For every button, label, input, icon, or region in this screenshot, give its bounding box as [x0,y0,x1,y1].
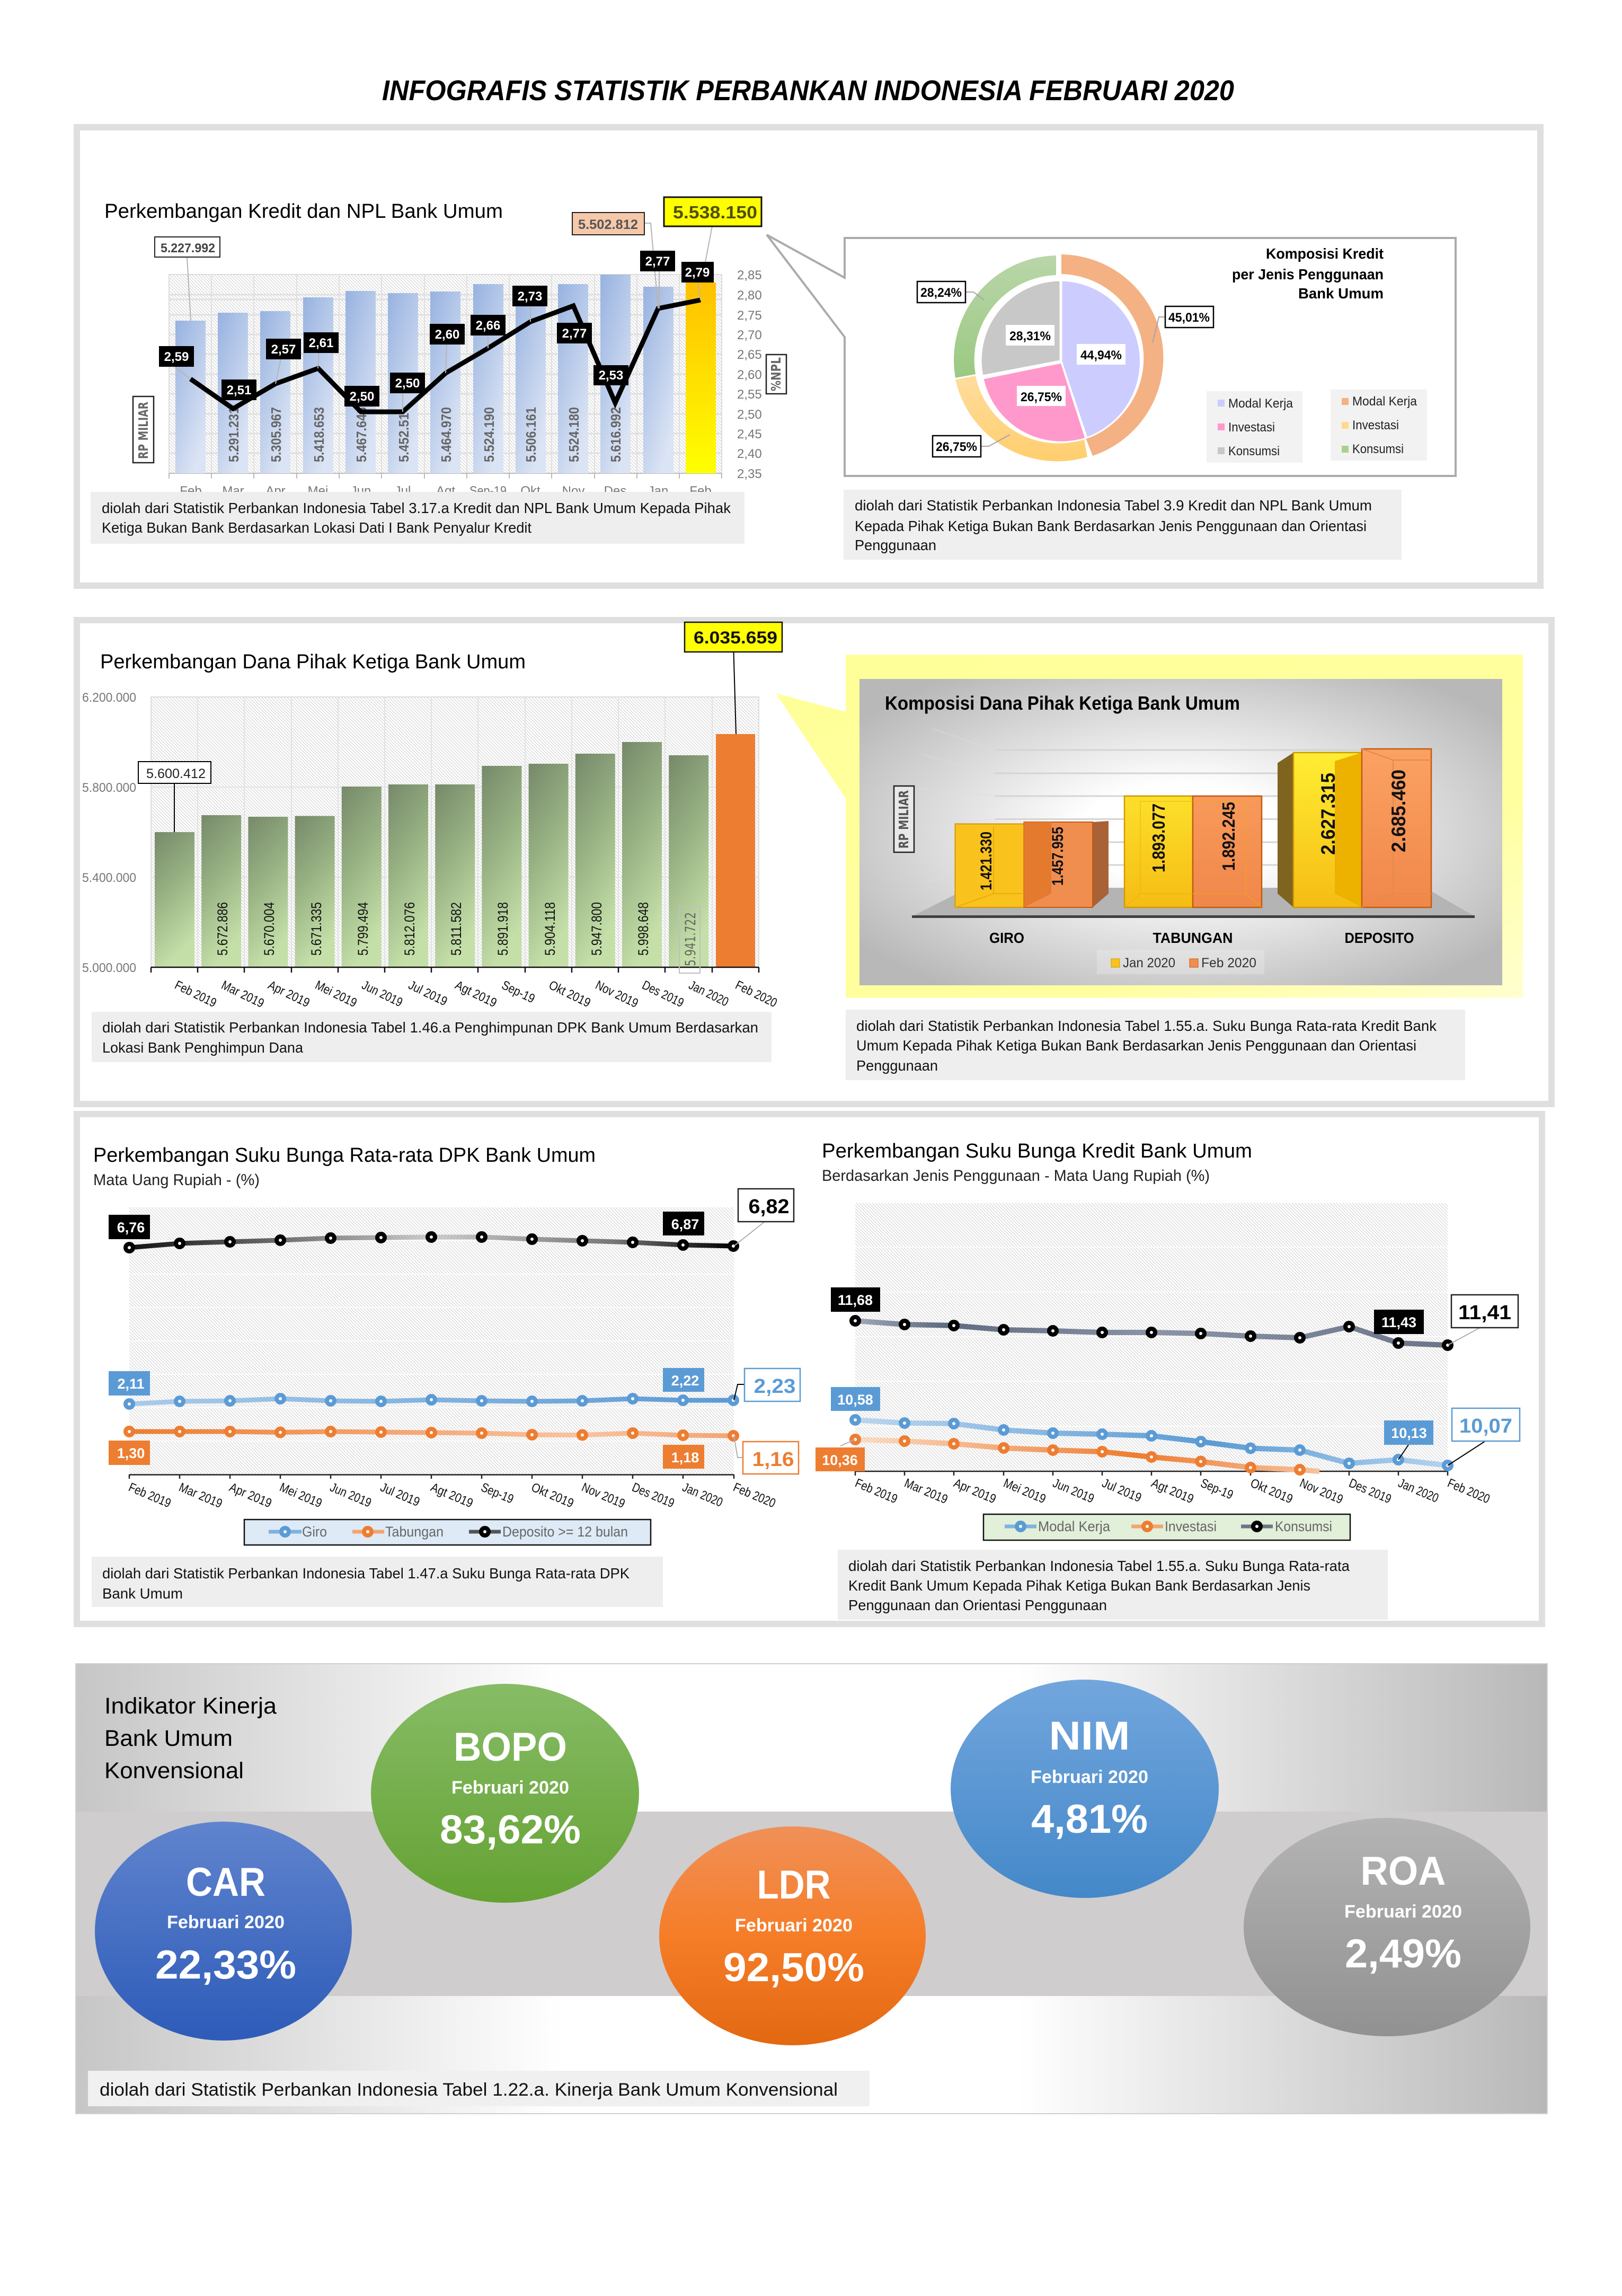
KPI: ROA: 2,49% [1345,1931,1461,1976]
KPI: ROA: Februari 2020 [1344,1902,1462,1922]
bar value labels: 5.672.886 [215,902,231,956]
source note: kinerja: diolah dari Statistik Perbankan Indonesia Tabel 1.22.a. Kinerja Bank Umum Konvensional [100,2080,838,2100]
NPL line [191,300,701,412]
month labels: Sep-19 [469,484,507,498]
legend: suku bunga kredit [983,1514,1350,1540]
data labels: konsumsi: 11,68 [838,1292,873,1308]
bar value labels: 5.467.646 [353,407,369,462]
bar value labels: 5.891.918 [495,902,511,956]
callout panel: komposisi kredit [767,235,1456,476]
data labels: tabungan [109,1441,799,1474]
heading: indikator kinerja: Indikator Kinerja [104,1693,277,1719]
floor [912,888,1475,916]
panel: indikator kinerja [76,1664,1547,2114]
month labels: Feb [689,484,712,498]
month labels: Mei 2019 [1001,1476,1048,1506]
month labels: Jul 2019 [378,1480,422,1509]
data labels: giro: 2,23 [754,1375,796,1398]
KPI: LDR [659,1826,926,2045]
month labels: Feb 2019 [853,1476,900,1506]
month labels: Jun 2019 [328,1480,374,1511]
month labels: Jul 2019 [1100,1476,1144,1505]
KPI: LDR: Februari 2020 [735,1915,853,1936]
series: modal kerja [852,1416,1451,1469]
month labels: Mar 2019 [902,1476,950,1507]
right axis labels: 2,75 [737,308,762,323]
bar value labels: 5.799.494 [355,902,371,956]
bar value labels: 5.671.335 [308,902,324,956]
month labels: Feb 2019 [127,1480,173,1511]
KPI: BOPO: BOPO [454,1725,567,1770]
series: giro [126,1395,737,1408]
month labels: Jul 2019 [406,978,449,1009]
pie data labels: 28,31% [1009,329,1051,343]
source note: komposisi DPK: diolah dari Statistik Perbankan Indonesia Tabel 1.55.a. Suku Bunga Rata-rata Kredit Bank [856,1018,1437,1034]
bar value labels: 5.670.004 [261,902,277,956]
legend: outer ring: Investasi [1352,418,1399,432]
data labels: giro [109,1368,800,1401]
source note: komposisi kredit: Penggunaan [855,537,936,553]
panel: dana pihak ketiga [77,620,1552,1104]
DEPOSITO bars [1278,749,1431,907]
month labels: Jun [351,484,371,498]
bar value labels [226,407,624,462]
panel: kredit dan NPL [77,127,1540,586]
axis title: NPL [766,355,786,394]
axis title: Rp miliar: RP MILIAR [896,790,911,849]
data label: investasi [816,1447,865,1471]
month labels: Feb 2019 [172,978,219,1010]
right axis labels: 2,45 [737,427,762,441]
month labels: Jun 2019 [359,978,405,1010]
month labels: Sep-19 [499,978,537,1006]
callout: Feb 2019: 5.227.992 [161,241,215,255]
bar value labels: 5.947.800 [589,902,605,956]
legend: suku bunga DPK: Giro [302,1524,327,1540]
month labels: Okt [520,484,540,498]
NPL labels: 2,73 [518,289,542,304]
month labels: Jan 2020 [1396,1476,1441,1506]
bar value labels: 1.457.955 [1049,827,1067,886]
month labels: Des [604,484,626,498]
KPI: ROA: ROA [1361,1849,1446,1894]
callout: Feb 2020 [685,622,782,734]
month labels: Mar [222,484,244,498]
data label: investasi: 10,36 [822,1452,858,1468]
NPL labels: 2,50 [350,390,374,404]
data labels: giro: 2,22 [671,1373,699,1389]
callout: Feb 2019 [155,237,220,257]
KPI: NIM: 4,81% [1031,1797,1148,1842]
month labels [172,978,779,1011]
KPI: NIM [951,1680,1219,1898]
source note: suku bunga kredit: Penggunaan dan Orientasi Penggunaan [848,1597,1107,1613]
legend: suku bunga DPK: Deposito >= 12 bulan [502,1524,628,1540]
right axis labels: 2,65 [737,348,762,362]
pie data labels: 45,01% [1168,311,1210,325]
heading: perkembangan DPK: Perkembangan Dana Pihak Ketiga Bank Umum [100,651,526,673]
KPI: BOPO: 83,62% [440,1807,581,1852]
right axis labels: 2,50 [737,408,762,422]
legend: Feb 2020 [1201,956,1256,970]
y axis labels [82,691,136,975]
data labels: tabungan: 1,16 [752,1449,794,1471]
source note: kredit: Ketiga Bukan Bank Berdasarkan Lokasi Dati I Bank Penyalur Kredit [102,519,531,536]
data labels: konsumsi: 11,43 [1381,1314,1416,1330]
month labels: Sep-19 [1199,1476,1235,1503]
NPL labels: 2,51 [227,383,251,398]
legend: suku bunga kredit: Investasi [1165,1518,1217,1534]
month labels: Apr 2019 [227,1480,274,1511]
bar value labels: 5.616.992 [608,407,624,462]
NPL labels: 2,59 [164,350,189,364]
month labels: Nov 2019 [1298,1476,1345,1507]
pie data labels: 28,24% [920,286,962,300]
KPI: LDR: LDR [757,1862,831,1908]
right axis labels: 2,40 [737,447,762,461]
chart: suku bunga kredit [816,1203,1520,1507]
right axis labels: 2,60 [737,368,762,382]
data labels: giro: 2,11 [117,1376,145,1392]
month labels: Des 2019 [1347,1476,1394,1506]
TABUNGAN bars [1124,796,1262,907]
heading: suku bunga kredit: Berdasarkan Jenis Penggunaan - Mata Uang Rupiah (%) [822,1167,1210,1185]
heading: komposisi kredit: Bank Umum [1298,285,1384,302]
source note: suku bunga DPK: Bank Umum [102,1585,183,1602]
legend: outer ring: Konsumsi [1352,442,1404,456]
right axis labels: 2,80 [737,288,762,303]
axis title: Rp miliar [133,396,154,463]
KPI: CAR: 22,33% [155,1942,296,1988]
month labels: Agt 2019 [429,1480,475,1511]
axis title: Rp miliar: RP MILIAR [136,402,151,459]
source note: DPK: diolah dari Statistik Perbankan Indonesia Tabel 1.46.a Penghimpunan DPK Bank Umum Berdasarkan [102,1019,758,1036]
callout: Feb 2019: 5.600.412 [146,766,206,781]
month labels: Feb 2020 [1446,1476,1492,1506]
chart: suku bunga DPK [109,1189,800,1511]
bar value labels: 5.998.648 [635,902,651,956]
bar value labels: 5.305.967 [268,407,284,462]
KPI: CAR: Februari 2020 [167,1912,285,1932]
month labels: Sep-19 [479,1480,516,1507]
month labels: Jan 2020 [686,978,731,1009]
series: tabungan [126,1428,737,1440]
title: INFOGRAFIS STATISTIK PERBANKAN INDONESIA FEBRUARI 2020 [382,75,1234,107]
source note: suku bunga kredit: diolah dari Statistik Perbankan Indonesia Tabel 1.55.a. Suku Bunga Rata-rata [848,1558,1350,1574]
legend: inner pie: Konsumsi [1228,444,1280,458]
category labels: TABUNGAN [1153,930,1233,946]
source note: suku bunga DPK [92,1557,663,1607]
right axis labels: 2,55 [737,387,762,402]
source note: komposisi DPK: Penggunaan [856,1057,938,1074]
heading: perkembangan kredit: Perkembangan Kredit dan NPL Bank Umum [104,200,503,223]
bar value labels: 5.506.161 [523,407,539,462]
callout: Jan 2020 [572,213,644,235]
month labels [853,1476,1492,1507]
legend: suku bunga DPK [244,1520,651,1545]
month labels: Des 2019 [640,978,686,1010]
bar value labels: 1.421.330 [978,832,995,890]
NPL labels: 2,79 [685,266,710,280]
KPI: NIM: NIM [1049,1714,1130,1759]
month labels: Feb 2020 [731,1480,778,1511]
source note: DPK [92,1012,772,1062]
chart background [859,679,1502,985]
month labels: Okt 2019 [529,1480,576,1511]
KPI: CAR: CAR [186,1860,265,1905]
donut: outer ring [954,254,1163,461]
y axis labels: 5.400.000 [82,871,136,885]
source note: komposisi kredit: Kepada Pihak Ketiga Bukan Bank Berdasarkan Jenis Penggunaan dan Orientasi [855,518,1367,534]
callout: Jan 2020: 5.502.812 [578,217,638,232]
data labels: deposito: 6,82 [748,1196,790,1218]
right axis labels: 2,35 [737,467,762,481]
source note: kredit: diolah dari Statistik Perbankan Indonesia Tabel 3.17.a Kredit dan NPL Bank Umum Kepada Pihak [102,500,731,516]
bars [175,275,716,473]
month labels: Jun 2019 [1051,1476,1096,1506]
data labels: modal kerja: 10,58 [837,1392,873,1408]
callout: Feb 2020 [664,197,761,226]
connector lines [175,223,712,412]
connector lines: blue labels [1398,1441,1485,1465]
connector line: giro [734,1384,744,1400]
bars [155,742,708,967]
heading: indikator kinerja: Konvensional [104,1758,244,1783]
month labels: Okt 2019 [546,978,593,1010]
pie data labels: 26,75% [1021,390,1062,404]
KPI: BOPO: Februari 2020 [451,1778,569,1798]
source note: kinerja [88,2071,870,2106]
panel: suku bunga [77,1114,1542,1624]
NPL labels: 2,77 [645,254,670,269]
series: deposito [126,1233,737,1251]
legend: inner pie [1207,391,1302,463]
month labels: Mar 2019 [219,978,267,1011]
series: investasi [852,1436,1319,1473]
legend: outer ring: Modal Kerja [1352,394,1417,409]
legend: inner pie: Investasi [1228,420,1275,435]
month labels: Mar 2019 [177,1480,224,1511]
KPI: BOPO [371,1684,639,1903]
background band [76,1812,1547,1996]
month labels: Feb [180,484,202,498]
source note: suku bunga kredit [838,1550,1388,1620]
month labels: Mei 2019 [313,978,359,1010]
series: konsumsi [852,1317,1451,1349]
month labels: Agt [436,484,455,498]
callout panel: komposisi DPK [776,655,1523,997]
source note: suku bunga kredit: Kredit Bank Umum Kepada Pihak Ketiga Bukan Bank Berdasarkan Jenis [848,1577,1310,1594]
heading: komposisi DPK: Komposisi Dana Pihak Ketiga Bank Umum [885,692,1240,714]
legend: outer ring [1331,390,1427,461]
bar value labels: 5.811.582 [448,902,464,956]
heading: komposisi kredit: per Jenis Penggunaan [1232,266,1384,282]
legend: suku bunga kredit: Konsumsi [1275,1518,1332,1534]
month labels: Nov [562,484,584,498]
axis title: Rp miliar [894,786,914,852]
legend: inner pie: Modal Kerja [1228,396,1293,411]
month labels: Apr 2019 [952,1476,998,1506]
right axis labels: 2,85 [737,268,762,282]
NPL labels [159,251,714,407]
GIRO bars [955,821,1109,907]
axis title: NPL: %NPL [768,357,784,391]
month labels: Feb 2020 [733,978,779,1010]
bar value labels [978,770,1410,890]
month labels: Nov 2019 [580,1480,627,1511]
NPL labels: 2,50 [395,376,420,391]
right axis labels [737,268,762,481]
heading: suku bunga DPK [93,1144,596,1189]
bar value labels: 5.464.970 [438,407,454,462]
NPL labels: 2,77 [562,326,587,341]
pie data labels: 44,94% [1080,348,1122,363]
heading: komposisi kredit [1232,245,1384,302]
month labels [180,484,712,498]
connector lines [840,1328,1480,1446]
heading: komposisi kredit: Komposisi Kredit [1266,245,1384,262]
data labels: deposito [109,1189,794,1239]
boxed value label: Jan 2020: 5.941.722 [683,912,699,966]
source note: DPK: Lokasi Bank Penghimpun Dana [102,1039,303,1056]
heading: suku bunga DPK: Perkembangan Suku Bunga Rata-rata DPK Bank Umum [93,1144,596,1167]
month labels: Jan 2020 [680,1480,725,1510]
month labels: Apr 2019 [265,978,312,1010]
data labels: modal kerja: 10,07 [1459,1415,1512,1437]
y axis labels: 5.000.000 [82,961,136,975]
KPI: LDR: 92,50% [723,1945,864,1990]
3D bar chart [912,729,1475,946]
connector lines [734,1222,765,1458]
bar value labels: 5.524.190 [481,407,497,462]
legend [1097,950,1264,974]
month labels: Agt 2019 [1149,1476,1196,1506]
bar value labels: 2.685.460 [1388,770,1410,852]
legend: Jan 2020 [1123,956,1175,970]
heading: suku bunga kredit [822,1140,1252,1185]
NPL labels: 2,57 [271,342,296,357]
source note: kredit [91,492,744,544]
NPL labels: 2,66 [476,319,500,333]
y axis labels: 6.200.000 [82,691,136,705]
data labels: tabungan: 1,18 [671,1450,699,1465]
legend: suku bunga kredit: Modal Kerja [1038,1518,1111,1534]
NPL labels: 2,53 [599,368,623,383]
bar value labels: 2.627.315 [1317,773,1339,855]
month labels: Des 2019 [630,1480,677,1511]
callout: Feb 2020: 5.538.150 [673,202,757,222]
source note: komposisi kredit [844,490,1402,560]
data labels: konsumsi [831,1287,1518,1334]
month labels: Agt 2019 [453,978,499,1010]
bar value labels: 5.452.51 [396,413,412,462]
data labels: deposito: 6,87 [671,1216,699,1232]
bar value labels: 1.892.245 [1219,802,1238,871]
month labels: Mei 2019 [278,1480,324,1511]
data labels: konsumsi: 11,41 [1458,1302,1511,1324]
data labels: modal kerja: 10,13 [1391,1425,1427,1441]
data labels: modal kerja [831,1387,1520,1445]
bar value labels: 5.524.180 [566,407,582,462]
source note: suku bunga DPK: diolah dari Statistik Perbankan Indonesia Tabel 1.47.a Suku Bunga Rata-rata DPK [102,1565,630,1582]
month labels: Jul [395,484,411,498]
callout: Feb 2020: 6.035.659 [694,628,777,647]
boxed value label: Jan 2020 [679,906,700,973]
month labels: Okt 2019 [1248,1476,1295,1506]
source note: komposisi DPK: Umum Kepada Pihak Ketiga Bukan Bank Berdasarkan Jenis Penggunaan dan Orientasi [856,1037,1416,1054]
heading: suku bunga DPK: Mata Uang Rupiah - (%) [93,1171,260,1189]
month labels: Nov 2019 [593,978,641,1011]
data labels: tabungan: 1,30 [117,1445,145,1461]
data labels: deposito: 6,76 [117,1220,145,1235]
axis line and ticks [151,967,759,973]
KPI: NIM: Februari 2020 [1031,1767,1148,1787]
pie leader lines [965,292,1165,446]
highlighted bar: Feb 2020 [716,734,755,967]
heading: suku bunga kredit: Perkembangan Suku Bunga Kredit Bank Umum [822,1140,1252,1162]
right axis labels: 2,70 [737,328,762,342]
month labels [127,1480,778,1511]
month labels: Jan [648,484,668,498]
bar value labels: 5.904.118 [542,902,558,956]
y axis labels: 5.800.000 [82,781,136,795]
bar value labels: 5.418.653 [311,407,327,462]
bar value labels: 1.893.077 [1149,803,1168,872]
NPL labels: 2,61 [309,336,333,350]
source note: komposisi DPK [846,1010,1465,1080]
source note: komposisi kredit: diolah dari Statistik Perbankan Indonesia Tabel 3.9 Kredit dan NPL Bank Umum [855,497,1372,514]
NPL labels: 2,60 [435,328,459,342]
bar value labels [215,902,651,956]
heading: indikator kinerja: Bank Umum [104,1726,233,1751]
bar value labels: 5.812.076 [402,902,418,956]
category labels: DEPOSITO [1345,930,1414,946]
pie: inner [981,280,1140,442]
category labels [989,930,1414,946]
month labels: Mei [308,484,328,498]
category labels: GIRO [989,930,1024,946]
chart: kredit bars with NPL line [133,197,786,498]
bar value labels: 5.291.231 [226,407,242,462]
month labels: Apr [265,484,286,498]
KPI: ROA [1244,1818,1530,2036]
chart: DPK bars [82,622,782,1011]
callout: Feb 2019 [138,762,211,832]
legend: suku bunga DPK: Tabungan [385,1524,444,1540]
heading: indikator kinerja [104,1693,277,1783]
KPI: CAR [95,1822,352,2041]
pie data labels [917,281,1213,457]
pie data labels: 26,75% [936,440,977,454]
